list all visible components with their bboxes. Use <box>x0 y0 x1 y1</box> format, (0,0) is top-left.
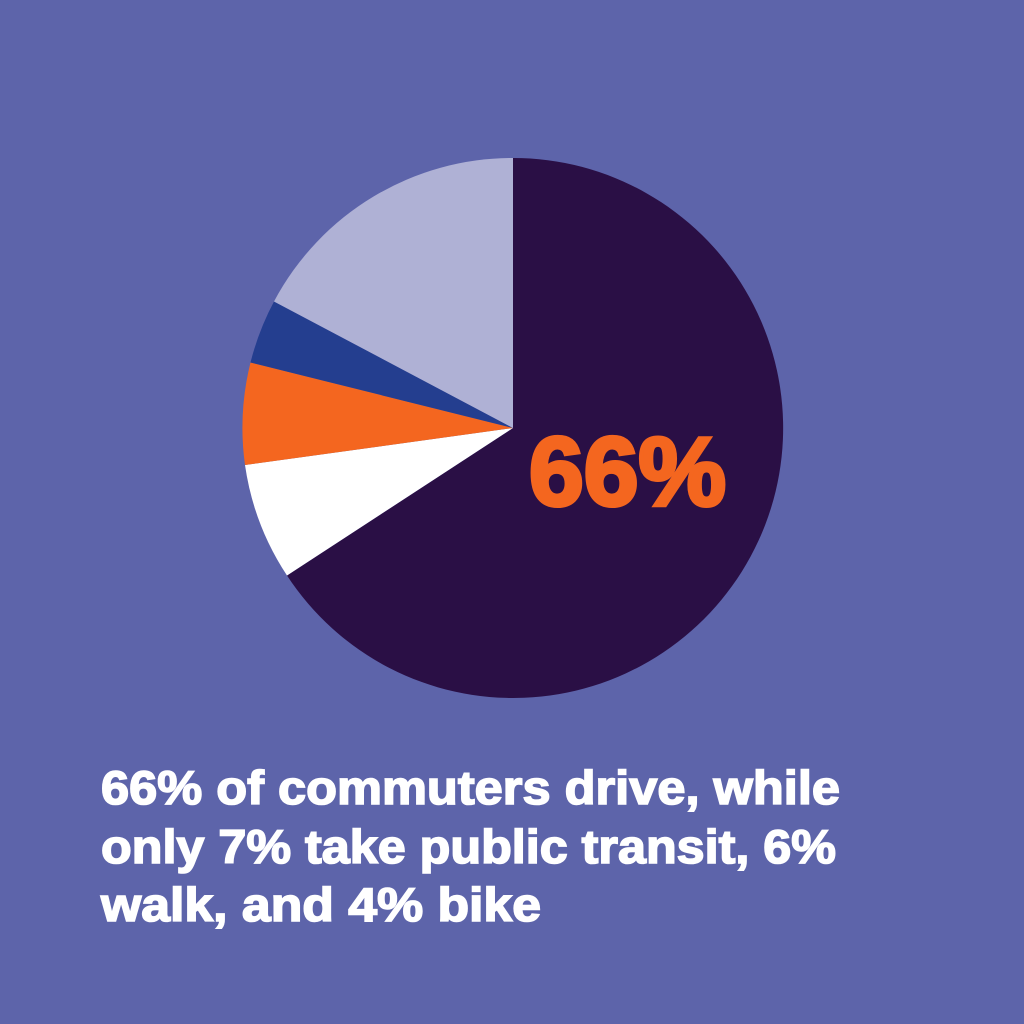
pie label: 66%: 66% <box>529 417 726 526</box>
caption line 2: only 7% take public transit, 6% <box>101 820 836 873</box>
slice: bike 4% <box>250 302 513 428</box>
slice: other <box>274 158 513 428</box>
slice: public transit 7% <box>245 428 513 576</box>
caption line 3: walk, and 4% bike <box>100 878 541 931</box>
slice: drive 66% <box>287 158 783 698</box>
caption <box>100 761 840 931</box>
caption line 1: 66% of commuters drive, while <box>101 761 840 814</box>
slice: walk 6% <box>242 362 513 465</box>
pie chart <box>242 158 783 698</box>
